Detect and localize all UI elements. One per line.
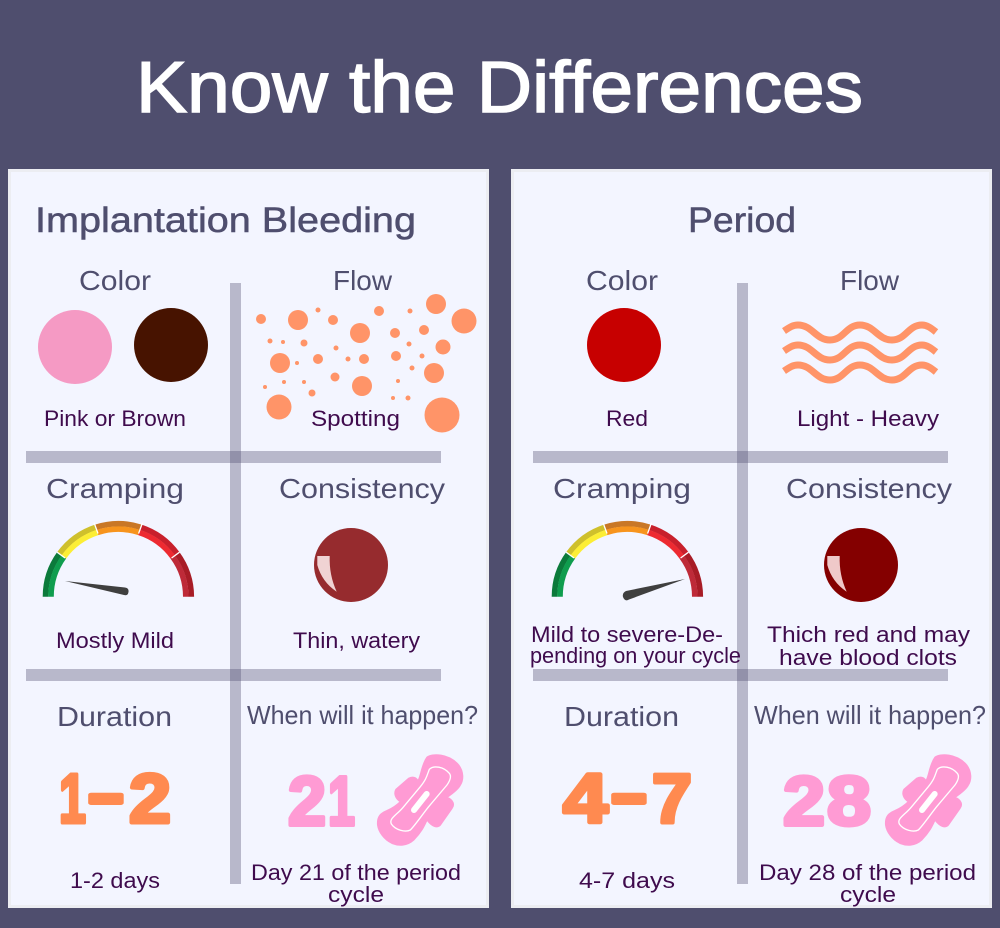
icon: red circle [587,308,661,382]
color caption: Pink or Brown [44,406,186,431]
timing label: When will it happen? [754,700,986,730]
cramping caption: Mild to severe-De- [531,622,723,647]
flow caption: Spotting [311,406,400,431]
grid dividers [26,283,441,884]
duration number [59,754,171,838]
consistency caption second line: have blood clots [779,645,957,670]
duration number: - [87,754,125,832]
timing caption: Day 21 of the period [251,860,461,885]
timing number [783,762,871,840]
cramping caption: Mostly Mild [56,628,174,653]
heading: implantation bleeding: Implantation Bleeding [35,201,416,240]
color label: Color [79,265,151,296]
cramping label: Cramping [46,473,184,504]
duration number: 2 [129,760,171,838]
icon: flow waves [784,325,936,380]
panel: period [512,170,990,907]
icon: sanitary pad [378,755,463,845]
timing number: 2 [783,762,825,840]
grid dividers [533,283,948,884]
flow caption: Light - Heavy [797,406,939,431]
flow label: Flow [840,265,900,296]
timing label: When will it happen? [247,700,478,730]
color label: Color [586,265,658,296]
icon: brown circle [134,308,208,382]
timing number [288,762,355,840]
icon: pink circle [38,310,112,384]
cramping label: Cramping [553,473,691,504]
icon: cramping gauge mild [45,522,191,597]
timing number: 2 [288,762,326,840]
cramping caption second line: pending on your cycle [530,643,741,668]
duration number: 1 [59,760,86,838]
icon: sanitary pad [886,755,971,845]
color caption: Red [606,406,648,431]
panel: implantation bleeding [10,170,488,907]
consistency caption: Thin, watery [293,628,420,653]
consistency label: Consistency [279,473,445,504]
duration caption: 4-7 days [579,868,675,893]
consistency caption: Thich red and may [767,622,970,647]
icon: spotting droplets [256,294,476,432]
title: Know the Differences [136,48,863,128]
duration number: 7 [652,760,692,838]
icon: thick drop [824,528,898,602]
heading: period: Period [688,201,796,240]
duration number [563,754,692,838]
icon: thin drop [314,528,388,602]
flow label: Flow [333,265,393,296]
timing number: 8 [827,762,871,840]
duration label: Duration [57,701,172,732]
icon: cramping gauge severe [554,522,700,600]
duration number: 4 [563,760,608,838]
duration number: - [610,754,648,832]
timing caption second line: cycle [328,882,384,907]
consistency label: Consistency [786,473,952,504]
timing number: 1 [328,762,355,840]
timing caption: Day 28 of the period [759,860,976,885]
duration label: Duration [564,701,679,732]
duration caption: 1-2 days [70,868,160,893]
timing caption second line: cycle [840,882,896,907]
